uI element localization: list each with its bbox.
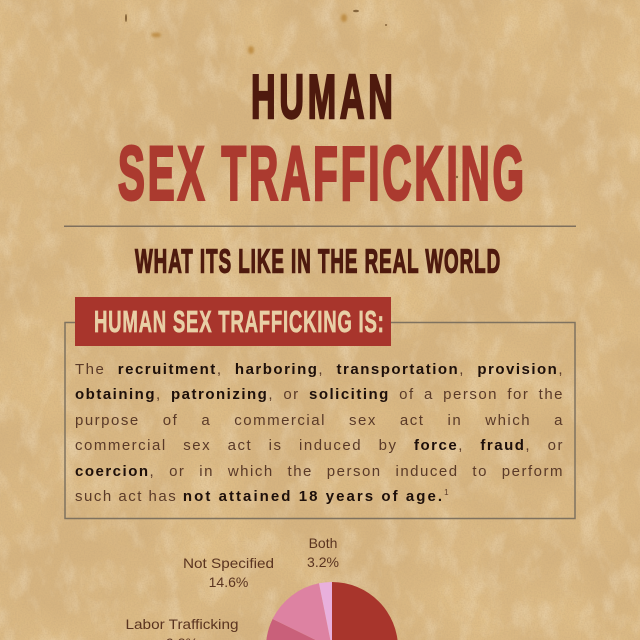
definition text: such act has not attained 18 years of age.1 bbox=[75, 488, 450, 505]
label: both: Both bbox=[309, 535, 337, 551]
divider line bbox=[64, 226, 576, 227]
definition text bbox=[75, 361, 564, 505]
label: labor trafficking: Labor Trafficking bbox=[126, 616, 238, 632]
pie chart bbox=[266, 582, 398, 640]
title: SEX TRAFFICKING: SEX TRAFFICKING bbox=[118, 131, 524, 216]
definition text: commercial sex act is induced by force, fraud, or bbox=[75, 437, 564, 454]
label: not specified: 14.6% bbox=[209, 574, 248, 590]
banner: human sex trafficking is bbox=[75, 297, 391, 346]
label: both: 3.2% bbox=[307, 554, 339, 570]
title: HUMAN: HUMAN bbox=[251, 62, 393, 131]
definition box outline bbox=[65, 322, 575, 518]
banner: human sex trafficking is: HUMAN SEX TRAFFICKING IS: bbox=[94, 305, 384, 339]
definition text: The recruitment, harboring, transportation, provision, bbox=[75, 361, 564, 378]
subtitle: WHAT ITS LIKE IN THE REAL WORLD bbox=[135, 241, 500, 280]
definition text: purpose of a commercial sex act in which a bbox=[75, 412, 564, 429]
definition text: obtaining, patronizing, or soliciting of a person for the bbox=[75, 386, 564, 403]
label: not specified: Not Specified bbox=[183, 555, 274, 571]
definition text: coercion, or in which the person induced to perform bbox=[75, 463, 564, 480]
